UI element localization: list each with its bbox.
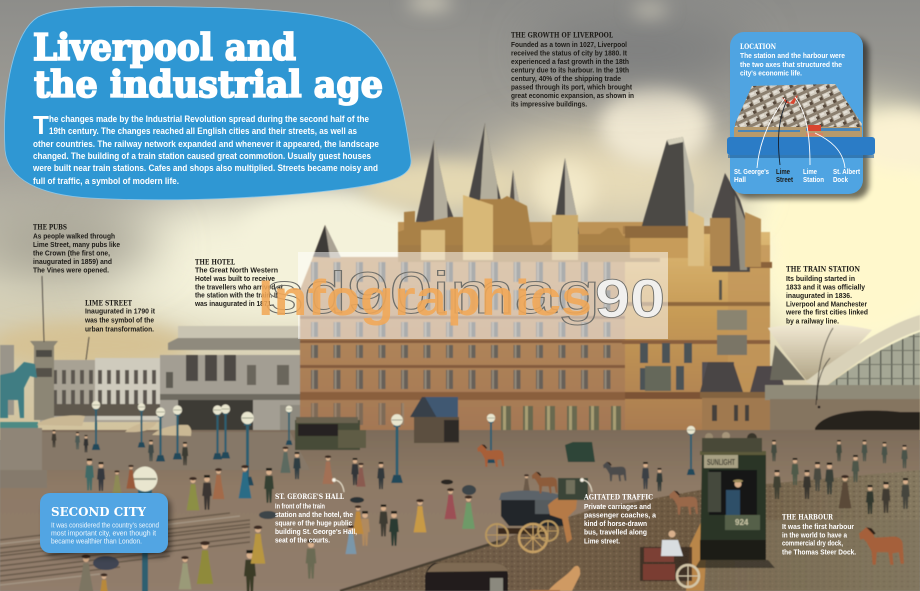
second city text: became wealthier than London. xyxy=(51,538,142,546)
location text: LOCATION xyxy=(740,42,777,51)
spires xyxy=(313,123,750,272)
text: the harbour: the Thomas Steer Dock. xyxy=(782,548,856,556)
text: St. George's Hall: In front of the train xyxy=(275,502,325,510)
text: the pubs: The Vines were opened. xyxy=(33,266,109,274)
text: the harbour: commercial dry dock, xyxy=(782,539,843,548)
text: the hotel xyxy=(194,258,283,308)
intro paragraph: T xyxy=(33,110,49,140)
station entrance porch xyxy=(410,397,459,443)
text: the hotel: Hotel was built to receive xyxy=(195,274,275,283)
text: Lime Street: was the symbol of the xyxy=(84,316,154,324)
text: the harbour: THE HARBOUR xyxy=(782,512,833,522)
text: Lime Street: urban transformation. xyxy=(85,324,154,334)
text: the train station: 1833 and it was officially xyxy=(786,282,866,292)
map labels: Lime xyxy=(803,167,817,176)
square ground xyxy=(0,430,920,591)
text: the growth of Liverpool: its impressive buildings. xyxy=(511,100,587,109)
text: the hotel: The Great North Western xyxy=(195,266,278,275)
map labels xyxy=(734,167,860,184)
map labels: Lime xyxy=(776,167,790,176)
second city heading: SECOND CITY xyxy=(51,505,146,519)
text: the growth of Liverpool: received the status of city by 1880. It xyxy=(511,48,627,58)
text: St. George's Hall: building St. George's Hall, xyxy=(275,527,357,536)
text: the pubs: THE PUBS xyxy=(33,222,67,232)
map labels: St. George's xyxy=(734,167,769,176)
double-deck horse bus: 924 xyxy=(735,518,749,527)
text: St. George's Hall xyxy=(275,492,357,545)
theatre building xyxy=(160,326,300,435)
map labels: St. Albert xyxy=(833,167,860,176)
location text xyxy=(740,42,845,78)
intro paragraph: were built near train stations. Cafes and shops also multiplied. Streets became noisy and xyxy=(32,163,378,174)
intro paragraph: other countries. The railway network expanded and whenever it appeared, the landscape xyxy=(33,139,379,150)
text: agitated traffic xyxy=(583,492,657,546)
map labels: Station xyxy=(803,175,824,184)
text: Lime Street: LIME STREET xyxy=(85,298,133,308)
text: the train station: inaugurated in 1836. xyxy=(786,291,852,300)
text: the hotel: was inaugurated in 1871. xyxy=(194,299,273,308)
horse-drawn carriage xyxy=(486,491,578,552)
text: the train station xyxy=(785,264,868,326)
text: the harbour: It was the first harbour xyxy=(782,522,854,531)
text: the pubs: the Crown (the first one, xyxy=(33,248,110,258)
text: the growth of Liverpool xyxy=(511,30,634,109)
map labels: Dock xyxy=(833,175,849,184)
text: the train station: were the first cities linked xyxy=(785,308,868,317)
horses xyxy=(477,444,904,591)
text: agitated traffic: bus, travelled along xyxy=(584,528,647,537)
sky background xyxy=(0,0,920,440)
text: the harbour: in the world to have a xyxy=(782,530,848,540)
text: the hotel: THE HOTEL xyxy=(195,258,235,266)
text: the growth of Liverpool: experienced a fast growth in the 18th xyxy=(511,57,629,66)
text: agitated traffic: Lime street. xyxy=(584,536,620,546)
text: the growth of Liverpool: THE GROWTH OF LIVERPOOL xyxy=(511,30,613,40)
panel: location map card xyxy=(727,32,875,199)
watermark xyxy=(258,252,668,339)
panel: title blob xyxy=(5,6,411,200)
intro paragraph: he changes made by the Industrial Revolution spread during the second half of the xyxy=(49,114,369,125)
location text: the two axes that structured the xyxy=(740,60,842,69)
text: Lime Street xyxy=(84,298,155,334)
station roof xyxy=(765,315,920,459)
text: the train station: THE TRAIN STATION xyxy=(786,264,861,274)
delivery cart xyxy=(640,530,699,587)
text: the growth of Liverpool: great economic expansion, as shown in xyxy=(511,91,634,100)
title: Liverpool and xyxy=(33,27,296,69)
point markers xyxy=(332,478,592,492)
intro paragraph: full of traffic, a symbol of modern life. xyxy=(33,176,179,187)
text: the growth of Liverpool: Founded as a town in 1027, Liverpool xyxy=(511,40,627,49)
street lamps xyxy=(92,401,695,591)
text: the train station: by a railway line. xyxy=(786,316,839,326)
text: the train station: Liverpool and Manchester xyxy=(786,300,867,308)
text: the growth of Liverpool: passed through its port, which brought xyxy=(511,82,632,92)
text: the train station: Its building started in xyxy=(786,274,855,283)
stone lions xyxy=(37,415,191,436)
text: the growth of Liverpool: century due to its harbour. In the 19th xyxy=(511,66,629,75)
text: St. George's Hall: ST. GEORGE'S HALL xyxy=(275,492,344,501)
panel shape xyxy=(5,6,411,200)
text: St. George's Hall: square of the huge public xyxy=(275,518,352,528)
text: agitated traffic: passenger coaches, a xyxy=(584,511,657,520)
location text: city's economic life. xyxy=(740,68,802,78)
main tower xyxy=(622,226,792,445)
crowd of pedestrians xyxy=(52,430,910,591)
second city text: It was considered the country's second xyxy=(51,522,159,530)
watermark: sd90imag xyxy=(265,261,600,326)
map labels: Hall xyxy=(734,175,746,184)
second city text xyxy=(51,522,159,546)
text: agitated traffic: AGITATED TRAFFIC xyxy=(583,492,653,502)
text: the harbour xyxy=(782,512,856,556)
text: the hotel: the station with the train. It xyxy=(195,291,278,300)
streetcar by the hotel xyxy=(295,417,366,450)
watermark: 90 xyxy=(595,269,665,329)
far left buildings xyxy=(0,276,165,422)
location text: The station and the harbour were xyxy=(740,51,845,60)
text: the pubs xyxy=(33,222,120,274)
double-deck horse bus: SUNLIGHT xyxy=(707,458,735,467)
text: the hotel: the travellers who arrived at xyxy=(195,282,283,292)
intro paragraph xyxy=(32,110,379,187)
title xyxy=(33,27,383,106)
map of Liverpool xyxy=(727,84,875,168)
map labels: Street xyxy=(776,175,793,184)
intro paragraph: changed. The building of a train station caused great commotion. Usually guest houses xyxy=(33,151,371,162)
text: St. George's Hall: seat of the courts. xyxy=(275,536,330,545)
text: the pubs: As people walked through xyxy=(33,232,115,240)
illustration: Lime Street scene xyxy=(0,123,920,591)
text: agitated traffic: kind of horse-drawn xyxy=(584,519,647,528)
title: the industrial age xyxy=(34,64,383,106)
crenellated roofline xyxy=(398,195,761,267)
second city text: most important city, even though it xyxy=(51,530,156,538)
railway hotel main block xyxy=(300,222,770,456)
text: the growth of Liverpool: century, 40% of the shipping trade xyxy=(511,74,621,83)
text: agitated traffic: Private carriages and xyxy=(584,502,651,511)
watermark: Infographics xyxy=(258,270,592,326)
intro paragraph: 19th century. The changes reached all English cities and their streets, as well as xyxy=(49,126,357,137)
text: the pubs: inaugurated in 1859) and xyxy=(33,257,112,266)
panel: second city xyxy=(40,493,171,557)
text: the pubs: Lime Street, many pubs like xyxy=(33,240,120,249)
double-deck horse bus xyxy=(695,432,775,568)
text: Lime Street: Inaugurated in 1790 it xyxy=(85,307,155,316)
motor car at bottom xyxy=(425,563,508,591)
text: St. George's Hall: station and the hotel, the xyxy=(275,510,353,519)
statue and pedestal xyxy=(0,362,47,488)
green carriage xyxy=(558,442,595,500)
